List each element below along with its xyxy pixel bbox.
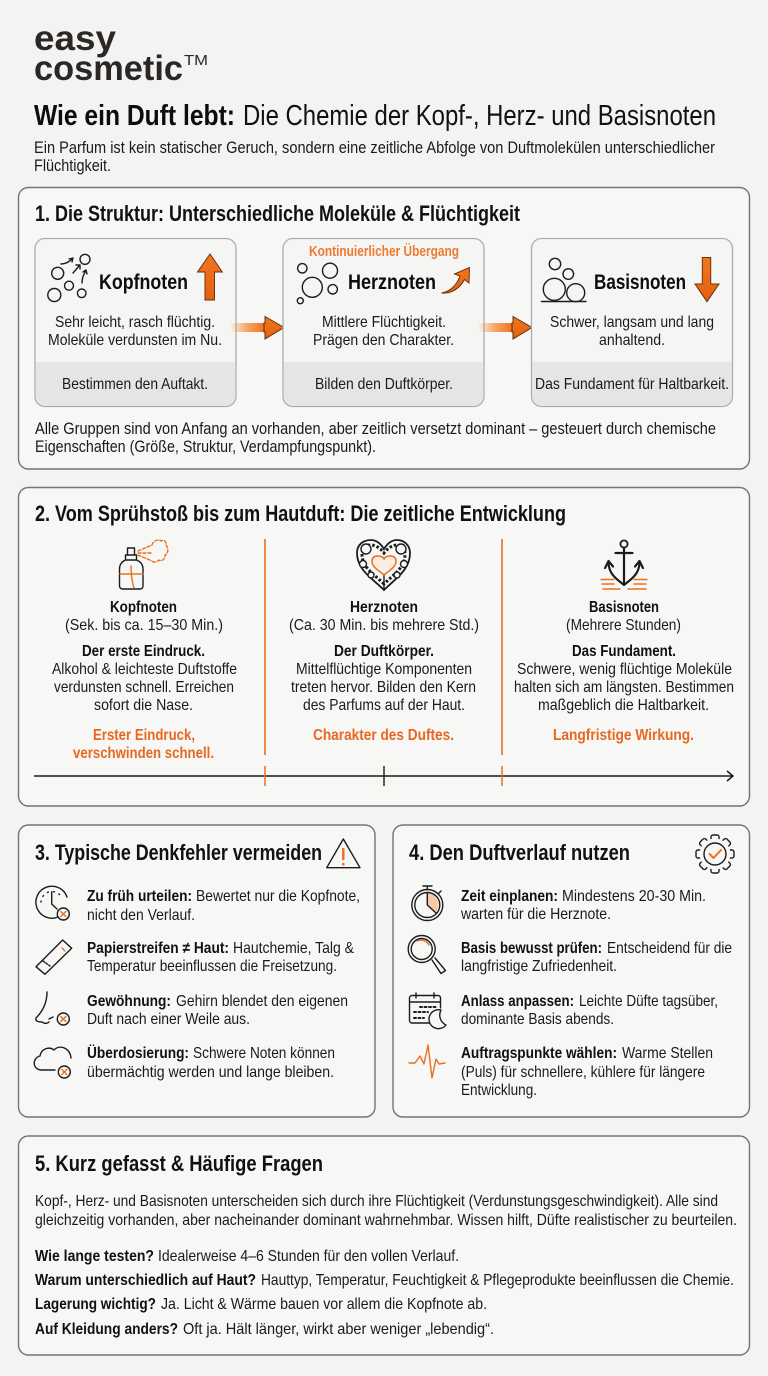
arrow: curved up xyxy=(442,268,470,293)
item: Zeit einplanen xyxy=(412,886,706,923)
summary text xyxy=(35,1193,737,1229)
text: Mindestens 20-30 Min. xyxy=(562,888,706,905)
text xyxy=(87,1043,335,1081)
text: Schwere Noten können xyxy=(193,1045,335,1062)
text: nicht den Verlauf. xyxy=(87,907,195,924)
card: Herznoten xyxy=(283,238,484,406)
transition label: Kontinuierlicher Übergang xyxy=(309,243,459,260)
title: Wie ein Duft lebt: xyxy=(34,100,235,132)
description: Das Fundament. xyxy=(572,643,676,660)
description: anhaltend. xyxy=(599,332,665,349)
text: dominante Basis abends. xyxy=(461,1011,614,1028)
takeaway: verschwinden schnell. xyxy=(73,745,214,762)
description: Schwere, wenig flüchtige Moleküle xyxy=(517,661,732,678)
text: Warme Stellen xyxy=(622,1045,713,1062)
icon: medium molecules xyxy=(297,263,338,304)
description xyxy=(514,643,734,714)
FAQ 2 xyxy=(35,1272,734,1289)
text: Temperatur beeinflussen die Freisetzung. xyxy=(87,958,337,975)
icon: volatile molecules xyxy=(48,254,90,302)
time range xyxy=(65,599,223,634)
FAQ 1: Idealerweise 4–6 Stunden für den vollen Verlauf. xyxy=(158,1248,459,1265)
description xyxy=(48,314,222,349)
item: Anlass anpassen xyxy=(410,993,718,1029)
icon: anchor xyxy=(601,540,647,589)
description xyxy=(550,314,714,349)
description xyxy=(313,314,454,349)
text xyxy=(461,940,732,975)
icon: warning triangle xyxy=(327,839,360,868)
logo: TM xyxy=(184,52,208,69)
description: Sehr leicht, rasch flüchtig. xyxy=(55,314,215,331)
time range: (Ca. 30 Min. bis mehrere Std.) xyxy=(289,617,479,634)
description: Alkohol & leichteste Duftstoffe xyxy=(52,661,237,678)
label: Herznoten: Herznoten xyxy=(348,271,436,294)
icon: clock xyxy=(36,886,69,920)
text: Auftragspunkte wählen: xyxy=(461,1045,617,1062)
icon: gear with check xyxy=(696,835,734,873)
text xyxy=(87,993,348,1028)
text: Entscheidend für die xyxy=(607,940,732,957)
text xyxy=(460,888,706,923)
takeaway: Erster Eindruck, xyxy=(93,727,195,744)
text: Entwicklung. xyxy=(461,1082,537,1099)
panel: 5 Kurz gefasst xyxy=(18,1136,750,1355)
time range: Kopfnoten xyxy=(110,599,177,616)
logo: easy xyxy=(34,19,117,58)
FAQ 4 xyxy=(35,1321,494,1338)
time range xyxy=(289,599,479,634)
description: Schwer, langsam und lang xyxy=(550,314,714,331)
panel: 3 Denkfehler xyxy=(18,825,375,1117)
icon: paper strip xyxy=(36,940,72,974)
heading 1: 1. Die Struktur: Unterschiedliche Moleküle & Flüchtigkeit xyxy=(35,201,521,226)
footer text: Das Fundament für Haltbarkeit. xyxy=(535,376,729,393)
text: warten für die Herznote. xyxy=(460,906,611,923)
logo: cosmetic xyxy=(34,49,183,88)
icon: calendar and moon xyxy=(410,993,446,1029)
heading 2: 2. Vom Sprühstoß bis zum Hautduft: Die zeitliche Entwicklung xyxy=(35,501,566,526)
text xyxy=(87,940,354,975)
description: Moleküle verdunsten im Nu. xyxy=(48,332,222,349)
text xyxy=(461,1045,713,1099)
icon: stopwatch xyxy=(412,886,443,920)
description: verdunsten schnell. Erreichen xyxy=(54,679,234,696)
icon: magnifier xyxy=(408,936,446,974)
note text: Eigenschaften (Größe, Struktur, Verdampfungspunkt). xyxy=(35,437,376,456)
logo xyxy=(34,19,208,88)
description: Der erste Eindruck. xyxy=(82,643,205,660)
heading 5: 5. Kurz gefasst & Häufige Fragen xyxy=(35,1151,323,1176)
column: Kopfnoten xyxy=(52,540,237,762)
takeaway: Charakter des Duftes. xyxy=(313,727,454,744)
intro text xyxy=(34,138,715,175)
text: Zu früh urteilen: xyxy=(87,888,192,905)
description: Der Duftkörper. xyxy=(334,643,434,660)
footer text: Bilden den Duftkörper. xyxy=(315,376,453,393)
timeline arrow xyxy=(34,766,733,786)
text: Basis bewusst prüfen: xyxy=(461,940,602,957)
item: Überdosierung xyxy=(34,1043,335,1081)
text: Papierstreifen ≠ Haut: xyxy=(87,940,229,957)
FAQ 1 xyxy=(35,1248,459,1265)
text: Bewertet nur die Kopfnote, xyxy=(196,888,360,905)
text: Gehirn blendet den eigenen xyxy=(176,993,348,1010)
text: (Puls) für schnellere, kühlere für längere xyxy=(461,1064,705,1081)
description: treten hervor. Bilden den Kern xyxy=(291,679,476,696)
panel: 1 Struktur xyxy=(18,188,750,469)
heading 3: 3. Typische Denkfehler vermeiden xyxy=(35,840,322,865)
item: Basis bewusst prüfen xyxy=(408,936,732,975)
arrow: Herz to Basis xyxy=(478,316,532,339)
text: Zeit einplanen: xyxy=(461,888,558,905)
time range: Herznoten xyxy=(350,599,418,616)
icon: pulse xyxy=(409,1045,445,1078)
note text xyxy=(35,419,716,456)
time range: Basisnoten xyxy=(589,599,659,616)
intro text: Flüchtigkeit. xyxy=(34,156,111,175)
FAQ 3: Ja. Licht & Wärme bauen vor allem die Kopfnote ab. xyxy=(161,1296,487,1313)
text: Duft nach einer Weile aus. xyxy=(87,1011,250,1028)
description: Prägen den Charakter. xyxy=(313,332,454,349)
arrow: Kopf to Herz xyxy=(230,316,284,339)
text: Gewöhnung: xyxy=(87,993,171,1010)
description xyxy=(291,643,476,714)
panel: 2 Entwicklung xyxy=(18,488,750,806)
title xyxy=(34,100,716,132)
FAQ 4: Oft ja. Hält länger, wirkt aber weniger „lebendig“. xyxy=(183,1321,494,1338)
FAQ 1: Wie lange testen? xyxy=(35,1248,154,1265)
icon: heavy molecules xyxy=(542,258,586,302)
FAQ 3 xyxy=(35,1296,487,1313)
FAQ 4: Auf Kleidung anders? xyxy=(35,1321,178,1338)
arrow: up xyxy=(198,254,222,300)
description: sofort die Nase. xyxy=(94,697,193,714)
item: Gewöhnung xyxy=(36,992,348,1028)
card: Basisnoten xyxy=(532,238,732,406)
text: langfristige Zufriedenheit. xyxy=(461,958,617,975)
column: Herznoten xyxy=(289,540,479,744)
heading 4: 4. Den Duftverlauf nutzen xyxy=(409,840,630,865)
text: Anlass anpassen: xyxy=(461,993,574,1010)
text: Hautchemie, Talg & xyxy=(233,940,354,957)
description: Mittlere Flüchtigkeit. xyxy=(322,314,446,331)
icon: nose xyxy=(36,992,69,1025)
label: Kopfnoten: Kopfnoten xyxy=(99,271,188,294)
description: des Parfums auf der Haut. xyxy=(303,697,465,714)
footer text: Bestimmen den Auftakt. xyxy=(62,376,208,393)
time range: (Mehrere Stunden) xyxy=(566,617,681,634)
icon: spray bottle xyxy=(120,540,168,589)
item: Zu früh urteilen xyxy=(36,886,360,924)
FAQ 2: Warum unterschiedlich auf Haut? xyxy=(35,1272,256,1289)
panel: 4 Duftverlauf xyxy=(393,825,750,1117)
time range: (Sek. bis ca. 15–30 Min.) xyxy=(65,617,223,634)
description: maßgeblich die Haltbarkeit. xyxy=(538,697,709,714)
icon: cloud xyxy=(34,1047,71,1078)
card: Kopfnoten xyxy=(35,238,236,406)
text xyxy=(87,888,360,924)
text: Überdosierung: xyxy=(87,1043,189,1062)
FAQ 3: Lagerung wichtig? xyxy=(35,1296,156,1313)
item: Auftragspunkte xyxy=(409,1045,713,1099)
text: Leichte Düfte tagsüber, xyxy=(579,993,718,1010)
time range xyxy=(566,599,681,634)
label: Basisnoten: Basisnoten xyxy=(594,271,686,294)
description: halten sich am längsten. Bestimmen xyxy=(514,679,734,696)
text xyxy=(461,993,718,1028)
icon: floral heart xyxy=(357,540,410,590)
text: übermächtig werden und lange bleiben. xyxy=(87,1064,334,1081)
takeaway xyxy=(73,727,214,762)
description: Mittelflüchtige Komponenten xyxy=(296,661,472,678)
takeaway: Langfristige Wirkung. xyxy=(553,727,694,744)
item: Papierstreifen xyxy=(36,940,354,975)
column: Basisnoten xyxy=(514,540,734,744)
arrow: down xyxy=(695,258,719,302)
description xyxy=(52,643,237,714)
